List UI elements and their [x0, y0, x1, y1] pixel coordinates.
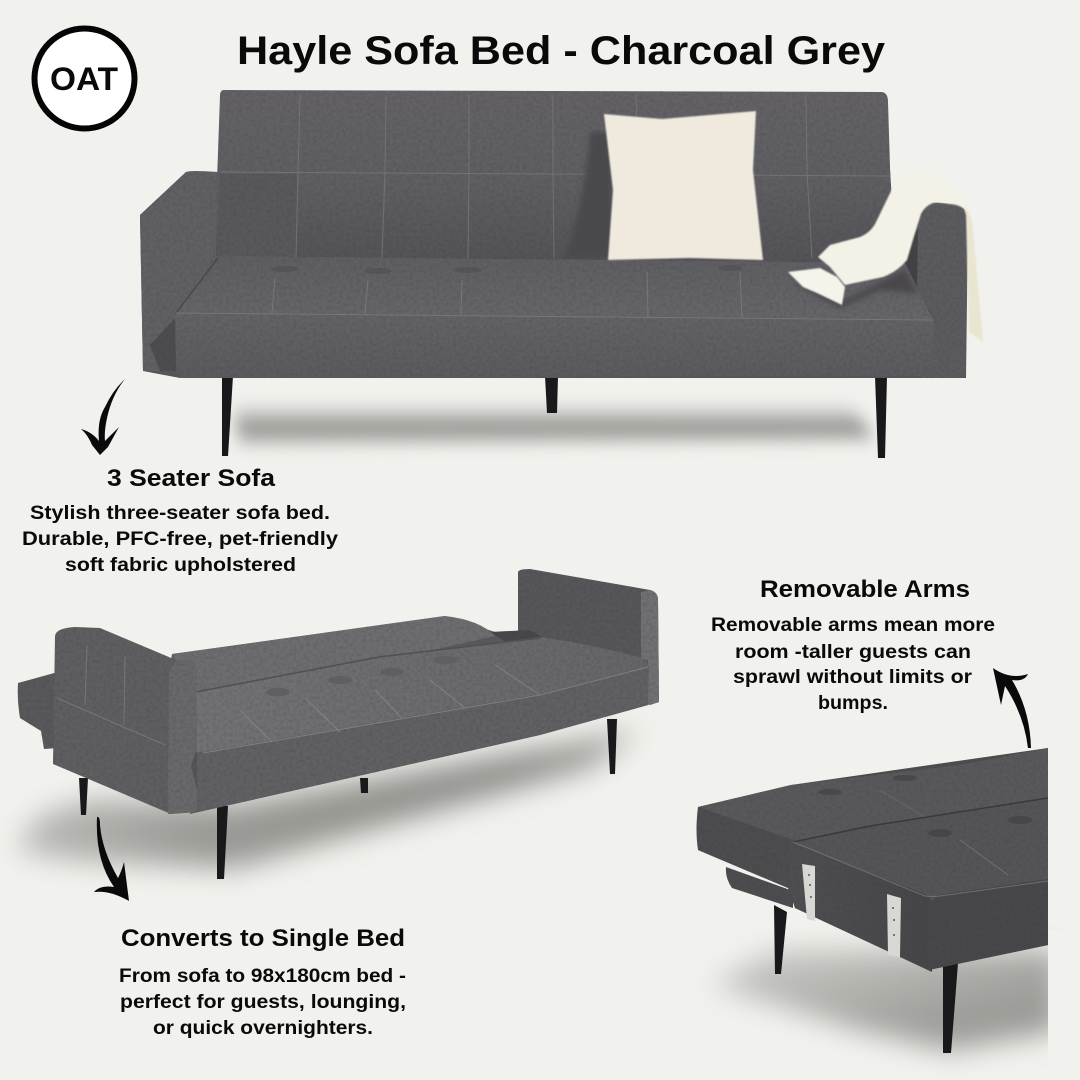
pillow shadow on backrest: [565, 132, 612, 258]
bed silhouette base: [698, 748, 1048, 970]
front seat: [190, 637, 649, 814]
rear cushion: [172, 616, 548, 700]
feature: removable arms: [711, 576, 995, 714]
left arm: [140, 171, 218, 371]
near arm seams: [57, 646, 165, 745]
floor shadow under sofa: [232, 402, 875, 445]
feature: 3 seater sofa: soft fabric upholstered: [65, 554, 296, 576]
sofa photo: front view with cushion and throw: [140, 90, 983, 458]
title: Hayle Sofa Bed - Charcoal Grey: [237, 29, 886, 73]
arrow: to removable arms: [993, 668, 1031, 748]
near arm: [53, 627, 197, 814]
sofa backrest: [214, 90, 893, 265]
sofa photo: close-up of arm brackets: [696, 748, 1080, 1080]
far arm: [518, 569, 659, 705]
metal brackets: [802, 864, 901, 957]
right arm: [900, 203, 968, 378]
feature: 3 seater sofa: Stylish three-seater sofa bed.: [30, 502, 330, 524]
logo: OAT badge: OAT: [50, 61, 118, 97]
feature: converts to single bed: [119, 925, 406, 1039]
feature: converts to single bed: From sofa to 98x180cm bed -: [119, 965, 406, 987]
cushion: [604, 111, 763, 260]
feature: converts to single bed: perfect for guests, lounging,: [120, 991, 406, 1013]
seat seams and tufts: [176, 258, 933, 320]
throw blanket: [788, 173, 983, 342]
sofa silhouette base: [140, 92, 966, 378]
rear cushion: [696, 748, 1048, 888]
bed silhouette base: [169, 616, 648, 814]
feature: converts to single bed: or quick overnighters.: [153, 1017, 373, 1039]
floor shadow: [15, 730, 640, 868]
feature: 3 seater sofa: [22, 465, 338, 576]
front seat seams and tufts: [793, 798, 1048, 896]
rear cushion tufts: [818, 775, 950, 832]
legs: [774, 905, 958, 1053]
feature: converts to single bed: Converts to Single Bed: [121, 925, 405, 952]
front seat top: [790, 798, 1048, 972]
protruding backrest edge: [18, 672, 58, 749]
seat cushion: [174, 256, 934, 378]
sofa legs: [222, 376, 887, 458]
feature: removable arms: Removable arms mean more: [711, 614, 995, 636]
seat seams and tufts: [196, 638, 648, 753]
feature: 3 seater sofa: Durable, PFC-free, pet-friendly: [22, 528, 338, 550]
arrow: to 3 seater sofa: [81, 379, 125, 455]
feature: removable arms: bumps.: [818, 692, 888, 714]
feature: removable arms: Removable Arms: [760, 576, 970, 603]
logo: OAT badge: [34, 28, 134, 128]
arrow: to converts to single bed: [94, 817, 129, 901]
backrest tufting seams: [220, 95, 890, 258]
sofa photo: flat bed view: [15, 569, 659, 879]
floor shadow: [712, 950, 1060, 1050]
feature: removable arms: sprawl without limits or: [733, 666, 972, 688]
legs: [79, 719, 617, 879]
throw shadow on seat: [790, 270, 918, 308]
under panel: [726, 867, 793, 908]
feature: removable arms: room -taller guests can: [735, 641, 971, 663]
feature: 3 seater sofa: 3 Seater Sofa: [107, 465, 276, 492]
